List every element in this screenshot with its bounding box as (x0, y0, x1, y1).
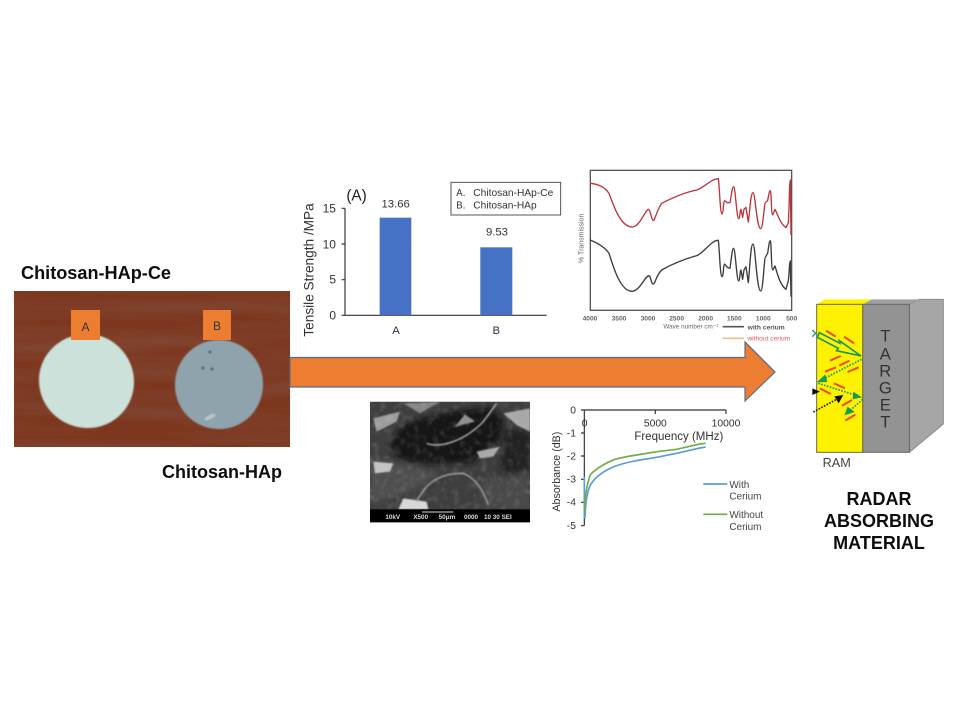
absorber particles (820, 331, 859, 421)
absorbance line chart (551, 405, 763, 533)
x tick labels: 10000 (712, 419, 741, 430)
label: Chitosan-HAp: Chitosan-HAp (162, 461, 282, 482)
sample A tag: A (81, 320, 90, 334)
sample B disc (175, 340, 263, 429)
x tick labels (582, 419, 741, 430)
y axis label: % Transmission (578, 214, 585, 263)
legend: with cerium: With (729, 480, 749, 491)
value 13.66: 13.66 (381, 198, 410, 210)
x tick labels: 2000 (698, 315, 713, 322)
y tick labels: 5 (329, 273, 336, 287)
legend box (451, 182, 561, 215)
incident wave hollow arrow (817, 333, 861, 356)
blue curve: with cerium (584, 447, 706, 518)
SEM info bar: X500 (413, 514, 429, 521)
SEM info bar: 10 30 SEI (484, 514, 512, 521)
SEM info bar (370, 509, 530, 522)
red spectrum: without cerium (590, 179, 791, 235)
x tick labels: 0 (582, 419, 588, 430)
y axis title: Tensile Strength /MPa (302, 203, 317, 337)
x axis title: Frequency (MHz) (634, 430, 723, 443)
bar A (380, 218, 411, 315)
legend: with cerium (723, 324, 785, 331)
legend box: B. (456, 201, 465, 212)
y axis title: Absorbance (dB) (551, 432, 563, 512)
x tick labels: 1500 (727, 315, 742, 322)
legend: with cerium: with cerium (747, 324, 785, 331)
y tick labels: 15 (323, 202, 336, 216)
FTIR spectrum chart (578, 170, 797, 342)
sample A disc (39, 334, 134, 428)
title: radar absorbing material: ABSORBING (824, 511, 934, 531)
target block side (909, 299, 943, 452)
target lettering: A (880, 344, 892, 363)
green curve: without cerium (584, 443, 706, 512)
legend: without cerium (703, 510, 763, 533)
process arrow (290, 342, 775, 401)
y tick labels (323, 202, 336, 322)
x tick labels (583, 315, 797, 322)
legend: without cerium (723, 335, 791, 342)
legend box: Chitosan-HAp (473, 201, 537, 212)
legend: without cerium: without cerium (746, 335, 791, 342)
x tick labels: 4000 (583, 315, 598, 322)
bar B (480, 247, 512, 315)
legend: without cerium: Cerium (729, 522, 762, 533)
label: Chitosan-HAp-Ce: Chitosan-HAp-Ce (21, 262, 171, 283)
RAM layer top (817, 299, 872, 304)
sample A tag (71, 310, 100, 340)
plot frame (590, 170, 792, 310)
x axis title: Wave number cm⁻¹ (663, 324, 719, 331)
y tick labels: -1 (567, 429, 576, 440)
axes (342, 208, 547, 315)
sample B tag: B (213, 319, 221, 333)
x tick labels: 2500 (669, 315, 684, 322)
value 9.53: 9.53 (486, 227, 508, 239)
x tick labels: 500 (786, 315, 797, 322)
panel tag (A): (A) (346, 187, 367, 204)
reflected dotted rays (817, 359, 863, 415)
x tick labels: 3000 (641, 315, 656, 322)
photo: two film samples on wood (14, 291, 290, 447)
category labels: A (392, 325, 400, 337)
y tick labels: -3 (567, 475, 576, 486)
target block top (863, 299, 919, 304)
y tick labels: 0 (570, 405, 576, 416)
axes (581, 410, 726, 526)
black spectrum: with cerium (590, 240, 791, 297)
target lettering: R (879, 362, 891, 381)
y tick labels (567, 405, 576, 532)
legend: with cerium (703, 480, 762, 503)
SEM info bar: 50μm (439, 514, 456, 521)
black dotted ray (812, 388, 843, 412)
title: radar absorbing material (824, 489, 934, 553)
target block front (863, 304, 909, 452)
target lettering: G (879, 378, 892, 397)
y tick labels: 0 (329, 308, 336, 322)
legend: with cerium: Cerium (729, 492, 762, 503)
y tick labels: -5 (567, 521, 576, 532)
SEM info bar: 0000 (464, 514, 479, 521)
sample B tag (203, 310, 231, 340)
y tick labels: 10 (323, 237, 336, 251)
RAM label: RAM (823, 456, 851, 470)
y tick labels: -4 (567, 498, 576, 509)
title: radar absorbing material: RADAR (846, 489, 912, 509)
legend box: A. (456, 188, 465, 199)
x tick labels: 5000 (644, 419, 667, 430)
target lettering (879, 327, 892, 431)
x tick labels: 3500 (612, 315, 627, 322)
x tick labels: 1000 (756, 315, 771, 322)
legend: without cerium: Without (729, 510, 763, 521)
target lettering: T (880, 412, 890, 431)
SEM info bar: 10kV (385, 514, 401, 521)
category labels: B (493, 325, 500, 337)
incident wave tail (812, 330, 816, 337)
radar absorbing material diagram (812, 299, 943, 470)
target lettering: T (880, 327, 890, 346)
y tick labels: -2 (567, 451, 576, 462)
category labels (392, 325, 500, 337)
RAM layer front (817, 304, 863, 452)
bar chart: tensile strength (302, 182, 561, 337)
legend box: Chitosan-HAp-Ce (473, 188, 553, 199)
SEM micrograph (370, 402, 530, 522)
target lettering: E (880, 396, 891, 415)
title: radar absorbing material: MATERIAL (833, 533, 925, 553)
